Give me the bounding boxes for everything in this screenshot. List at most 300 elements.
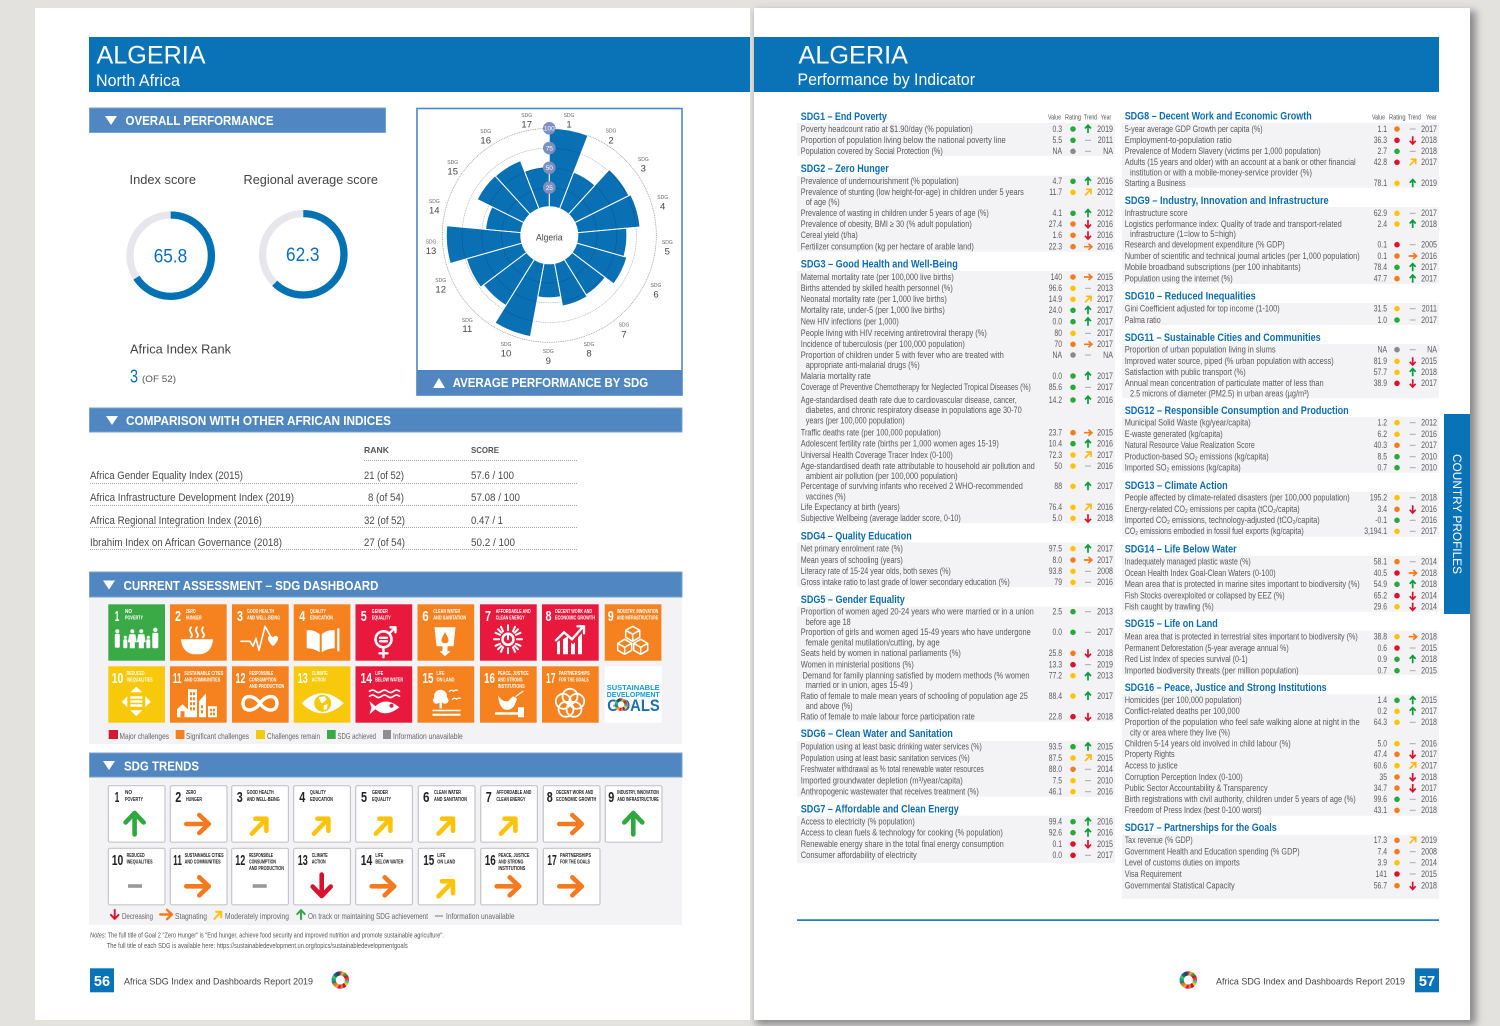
SDG axis labels: SDG: [426, 240, 437, 246]
scale markers: 25: [546, 185, 553, 192]
years: 2017: [1421, 749, 1437, 759]
years: 2015: [1421, 666, 1437, 676]
trends: [1410, 309, 1416, 320]
years: 2016: [1097, 230, 1113, 240]
indicators: SDG3: Malaria mortality rate: [801, 371, 871, 381]
dashboard legend: SDG achieved: [338, 731, 376, 741]
tile: SDG 11: AND COMMUNITIES: [184, 677, 221, 683]
tile: SDG 2: [170, 604, 227, 661]
comparison table: Africa Infrastructure Development Index (2019): [90, 492, 294, 504]
SDG axis labels: SDG: [435, 278, 446, 284]
section: SDG4: [797, 530, 1115, 587]
years: [1421, 304, 1437, 325]
header: overall performance: OVERALL PERFORMANCE: [126, 113, 274, 128]
values: [1374, 418, 1387, 473]
values: [1374, 345, 1388, 388]
indicators: SDG16: Proportion of the population who feel safe walking alone at night in the: [1125, 717, 1360, 727]
ratings: [1394, 347, 1400, 386]
header: comparison with other African indices: [90, 408, 682, 432]
tile: SDG 1: 1: [115, 608, 119, 625]
years: 2018: [1421, 632, 1437, 642]
values: [1049, 176, 1062, 252]
trend: SDG 4: [294, 786, 350, 842]
years: 2018: [1421, 579, 1437, 589]
column headers right: Trend: [1408, 112, 1421, 122]
comparison table: 32 (of 52): [364, 515, 405, 527]
years: 2010: [1421, 452, 1437, 462]
SDG axis labels: 11: [462, 324, 472, 335]
values: 99.6: [1374, 794, 1387, 804]
panel: SDG trends: [89, 753, 682, 925]
trends: [1084, 274, 1092, 522]
regional average gauge: 62.3: [286, 244, 320, 266]
trend: SDG 6: [418, 786, 475, 842]
indicators: SDG14: Fish caught by trawling (%): [1125, 602, 1214, 612]
ratings: [1070, 744, 1076, 794]
tile: SDG 2: 2: [175, 608, 181, 625]
indicators: SDG5: Ratio of female to male labour force participation rate: [801, 712, 975, 722]
indicators: SDG2: [801, 176, 1024, 252]
indicators: SDG3: appropriate anti-malarial drugs (%): [806, 360, 920, 370]
column headers left: Year: [1101, 112, 1112, 122]
SDG axis labels: 14: [429, 206, 440, 217]
years: 2017: [1421, 274, 1437, 284]
values: 93.8: [1049, 566, 1062, 576]
trend: SDG 17: FOR THE GOALS: [560, 859, 590, 865]
trends legend: Information unavailable: [446, 911, 515, 921]
dashboard legend: Major challenges: [120, 731, 169, 741]
years: 2019: [1421, 178, 1437, 188]
indicators: SDG5: Seats held by women in national parliaments (%): [801, 648, 961, 658]
years: 2015: [1097, 839, 1113, 849]
tile: SDG 14: 14: [360, 670, 372, 687]
trend: SDG 8: [543, 786, 600, 842]
column headers left: Value: [1048, 112, 1061, 122]
trend: SDG 11: [170, 848, 227, 905]
comparison table: 57.08 / 100: [471, 492, 520, 504]
trend: SDG 17: [543, 848, 600, 905]
left page: [35, 8, 750, 1020]
tile: SDG 14: LIFE: [375, 671, 384, 677]
values: 0.1: [1377, 240, 1387, 250]
panel footer bar: [417, 370, 682, 395]
scale markers: 50: [546, 165, 553, 172]
scale markers: 75: [546, 145, 553, 152]
trend: SDG 12: AND PRODUCTION: [249, 866, 284, 872]
values: 87.5: [1049, 753, 1062, 763]
heading: SDG7: SDG7 – Affordable and Clean Energy: [801, 804, 960, 816]
indicators: SDG16: Conflict-related deaths per 100,000: [1125, 706, 1240, 716]
SDG axis labels: SDG: [662, 240, 673, 246]
section: SDG12: [1122, 405, 1439, 473]
values: [1374, 695, 1387, 815]
ratings: [1394, 210, 1400, 282]
tile: SDG 5: [356, 604, 412, 661]
trend: SDG 1: NO: [125, 790, 132, 796]
indicators: SDG10: [1125, 304, 1280, 325]
notes: [90, 930, 444, 950]
indicators: SDG17: Tax revenue (% GDP): [1125, 835, 1193, 845]
SDG axis labels: SDG: [606, 128, 617, 134]
years: 2018: [1421, 717, 1437, 727]
tile: SDG 16: PEACE, JUSTICE: [498, 671, 529, 677]
index score gauge: Index score: [130, 173, 196, 187]
section: SDG11: [1122, 332, 1439, 398]
trends: [1084, 545, 1092, 582]
trend: SDG 6: 6: [423, 789, 429, 806]
tile: SDG 15: 15: [422, 670, 434, 687]
values: [1374, 632, 1387, 676]
values: 92.6: [1049, 828, 1062, 838]
tile: SDG 3: AND WELL-BEING: [247, 615, 280, 621]
SDG logo tile: GOALS: [607, 696, 660, 715]
heading: SDG4: SDG4 – Quality Education: [801, 530, 912, 542]
values: 47.7: [1374, 274, 1387, 284]
values: -0.1: [1375, 515, 1387, 525]
tile: SDG 12: AND PRODUCTION: [249, 684, 285, 690]
indicators: SDG3: Maternal mortality rate (per 100,000 live births): [801, 272, 954, 282]
years: 2017: [1421, 761, 1437, 771]
tile: SDG 12: 12: [236, 670, 246, 687]
years: 2017: [1421, 706, 1437, 716]
comparison table: Ibrahim Index on African Governance (2018): [90, 537, 282, 549]
footer: page 57: 57: [1419, 974, 1435, 990]
indicators: SDG14: Fish Stocks overexploited or collapsed by EEZ (%): [1125, 590, 1285, 600]
tile: SDG 7: 7: [485, 608, 491, 625]
ratings: [1394, 634, 1400, 674]
values: 46.1: [1049, 787, 1062, 797]
tile: SDG 8: ECONOMIC GROWTH: [555, 615, 595, 621]
footer: page 56: Africa SDG Index and Dashboards Report 2019: [124, 976, 313, 986]
values: 40.3: [1374, 440, 1387, 450]
values: 24.0: [1049, 305, 1062, 315]
tile: SDG 17: [542, 666, 599, 723]
trends: [1085, 743, 1091, 792]
trend: SDG 1: POVERTY: [125, 797, 143, 803]
values: 5.5: [1052, 135, 1062, 145]
values: 62.9: [1374, 208, 1387, 218]
tile: SDG 4: [294, 604, 350, 661]
indicators: SDG1: [801, 124, 1006, 156]
years: [1097, 124, 1114, 156]
section: SDG7: [797, 804, 1115, 863]
years: 2018: [1421, 219, 1437, 229]
indicators: SDG15: Red List Index of species survival (0-1): [1125, 654, 1248, 664]
SDG axis labels: 10: [501, 349, 511, 360]
years: [1421, 124, 1437, 188]
indicators: SDG8: Employment-to-population ratio: [1125, 135, 1232, 145]
indicators: SDG3: Universal Health Coverage Tracer Index (0-100): [801, 450, 953, 460]
tile: SDG 17: FOR THE GOALS: [559, 677, 589, 683]
tile: SDG 13: CLIMATE: [312, 671, 328, 677]
africa index rank: [130, 342, 232, 387]
ratings: [1394, 559, 1400, 610]
indicators: SDG12: E-waste generated (kg/capita): [1125, 429, 1223, 439]
years: [1421, 632, 1437, 676]
tile: SDG 8: 8: [546, 608, 552, 625]
values: [1374, 835, 1387, 891]
heading: SDG9: SDG9 – Industry, Innovation and Infrastructure: [1125, 195, 1329, 207]
indicators: SDG2: Prevalence of stunting (low height-for-age) in children under 5 years: [801, 187, 1024, 197]
values: NA: [1053, 146, 1063, 156]
values: 0.0: [1052, 627, 1062, 637]
africa index rank: Africa Index Rank: [130, 342, 232, 356]
tile: SDG 8: DECENT WORK AND: [555, 609, 592, 615]
SDG axis labels: 13: [426, 246, 436, 257]
SDG axis labels: 7: [621, 329, 627, 340]
years: 2015: [1421, 869, 1437, 879]
ratings: [1394, 306, 1400, 323]
values: 56.7: [1374, 881, 1387, 891]
panel: SDG dashboard: [89, 572, 682, 744]
years: 2015: [1421, 356, 1437, 366]
trend: SDG 9: AND INFRASTRUCTURE: [617, 797, 659, 803]
SDG axis labels: 5: [665, 246, 670, 257]
values: 23.7: [1049, 428, 1062, 438]
tile: SDG 9: AND INFRASTRUCTURE: [617, 615, 659, 621]
indicators: SDG8: institution or with a mobile-money-service provider (%): [1130, 168, 1312, 178]
SDG axis labels: SDG: [651, 283, 662, 289]
indicators: SDG14: Inadequately managed plastic waste (%): [1125, 556, 1251, 566]
trend: SDG 5: GENDER: [372, 790, 388, 796]
tile: SDG 15: LIFE: [436, 671, 445, 677]
trends: [1409, 213, 1417, 283]
values: 7.4: [1377, 847, 1387, 857]
trend: SDG 7: AFFORDABLE AND: [496, 790, 532, 796]
years: [1421, 557, 1437, 612]
indicators: SDG4: Mean years of schooling (years): [801, 555, 903, 565]
tile: SDG 11: 11: [173, 670, 182, 687]
tile: SDG 10: INEQUALITIES: [127, 677, 153, 683]
regional average gauge: Regional average score: [244, 173, 378, 187]
indicators: SDG15: [1125, 632, 1358, 676]
tile: SDG 7: AFFORDABLE AND: [496, 609, 531, 615]
trend: SDG 16: [481, 848, 537, 905]
years: 2011: [1098, 135, 1113, 145]
years: 2017: [1097, 305, 1113, 315]
years: 2016: [1097, 176, 1113, 186]
SDG axis labels: [426, 113, 673, 367]
scale markers: 100: [544, 126, 555, 132]
indicators: SDG2: Prevalence of obesity, BMI ≥ 30 (% adult population): [801, 219, 972, 229]
values: [1374, 557, 1387, 612]
years: 2016: [1097, 502, 1113, 512]
trend: SDG 5: [356, 786, 412, 842]
years: 2016: [1097, 577, 1113, 587]
trend: SDG 11: AND COMMUNITIES: [185, 859, 221, 865]
subtitle: North Africa: [96, 72, 181, 90]
values: NA: [1378, 345, 1388, 355]
column headers right: Year: [1426, 112, 1437, 122]
years: 2016: [1097, 439, 1113, 449]
trend: SDG 14: BELOW WATER: [375, 859, 404, 865]
trend: SDG 3: 3: [237, 789, 243, 806]
values: 79: [1054, 577, 1062, 587]
years: 2018: [1421, 135, 1437, 145]
values: 0.7: [1377, 666, 1387, 676]
trends: [1410, 498, 1416, 531]
indicators: SDG12: Production-based SO₂ emissions (kg/capita): [1125, 452, 1269, 462]
indicators: SDG3: Coverage of Preventive Chemotherapy for Neglected Tropical Diseases (%): [801, 382, 1031, 392]
indicators: SDG16: Corruption Perception Index (0-100): [1125, 772, 1243, 782]
values: 13.3: [1049, 660, 1062, 670]
years: 2017: [1421, 378, 1437, 388]
notes: The full title of each SDG is available here: https://sustainabledevelopment.un.org/topics/sustainabledevelopmentgoals: [107, 941, 408, 950]
values: 81.9: [1374, 356, 1387, 366]
years: 2017: [1097, 627, 1113, 637]
trend: SDG 17: PARTNERSHIPS: [560, 853, 592, 859]
SDG axis labels: SDG: [564, 113, 575, 119]
indicators: SDG12: Municipal Solid Waste (kg/year/capita): [1125, 418, 1251, 428]
trend: SDG 2: HUNGER: [186, 797, 202, 803]
trends: [1410, 697, 1416, 810]
years: 2016: [1421, 794, 1437, 804]
footer: page 56: [90, 968, 349, 992]
values: 3.9: [1377, 858, 1387, 868]
indicators: SDG5: Proportion of women aged 20-24 years who were married or in a union: [801, 606, 1034, 616]
indicators: SDG3: Neonatal mortality rate (per 1,000 live births): [801, 294, 947, 304]
indicators: SDG9: [1125, 208, 1360, 284]
years: 2018: [1421, 568, 1437, 578]
years: 2018: [1097, 648, 1113, 658]
dashboard legend: Significant challenges: [186, 731, 249, 741]
indicators: SDG13: Imported CO₂ emissions, technology-adjusted (tCO₂/capita): [1125, 515, 1320, 525]
indicators: SDG3: Adolescent fertility rate (births per 1,000 women ages 15-19): [801, 438, 999, 448]
trends: [1085, 612, 1091, 720]
values: NA: [1053, 350, 1063, 360]
tile: SDG 7: [480, 604, 537, 661]
values: 0.1: [1052, 839, 1062, 849]
indicators: SDG9: infrastructure (1=low to 5=high): [1130, 229, 1236, 239]
years: 2017: [1097, 294, 1113, 304]
indicators: SDG16: [1125, 695, 1360, 815]
years: 2014: [1421, 591, 1437, 601]
indicators: SDG17: Visa Requirement: [1125, 869, 1182, 879]
values: 25.8: [1049, 648, 1062, 658]
values: 76.4: [1049, 502, 1062, 512]
values: 1.6: [1052, 230, 1062, 240]
comparison table: Africa Gender Equality Index (2015): [90, 470, 243, 482]
years: 2016: [1097, 787, 1113, 797]
values: 4.1: [1052, 208, 1062, 218]
side tab: country profiles: [1444, 414, 1470, 614]
tile: SDG 2: ZERO: [186, 609, 196, 615]
years: [1421, 835, 1437, 891]
comparison table: 8 (of 54): [368, 492, 404, 504]
values: [1049, 742, 1062, 797]
SDG logo tile: [605, 666, 662, 723]
values: 1.1: [1377, 124, 1387, 134]
years: 2016: [1097, 817, 1113, 827]
years: 2016: [1421, 429, 1437, 439]
indicators: SDG1: Population covered by Social Protection (%): [801, 146, 943, 156]
section: SDG1: [797, 111, 1115, 156]
header: overall performance: [90, 108, 386, 132]
values: 14.2: [1049, 395, 1062, 405]
indicators: SDG15: Mean area that is protected in terrestrial sites important to biodiversity (%): [1125, 632, 1358, 642]
years: 2017: [1421, 157, 1437, 167]
values: 97.5: [1049, 544, 1062, 554]
trend: SDG 13: ACTION: [312, 859, 326, 865]
values: 65.2: [1374, 591, 1387, 601]
tile: SDG 1: [108, 604, 165, 661]
values: 7.5: [1052, 776, 1062, 786]
indicators: SDG5: [801, 606, 1034, 722]
years: NA: [1103, 146, 1114, 156]
values: 8.0: [1052, 555, 1062, 565]
section: SDG16: [1122, 682, 1439, 816]
ratings: [1394, 420, 1400, 471]
footer: page 57: [1180, 968, 1439, 992]
values: 0.2: [1377, 706, 1387, 716]
values: [1049, 817, 1062, 860]
years: 2008: [1421, 847, 1437, 857]
comparison table: RANK: [364, 445, 390, 455]
years: [1421, 493, 1437, 536]
indicators: SDG5: married or in union, ages 15-49 ): [806, 680, 913, 690]
values: 31.5: [1374, 304, 1387, 314]
indicators: SDG17: Government Health and Education spending (% GDP): [1125, 846, 1300, 856]
column headers right: Rating: [1389, 112, 1406, 122]
icon: SDG wheel: [1180, 971, 1197, 989]
tile: SDG 5: GENDER: [372, 609, 388, 615]
indicators: SDG16: Property Rights: [1125, 749, 1175, 759]
tile: SDG 17: PARTNERSHIPS: [559, 671, 590, 677]
tile: SDG 5: 5: [361, 608, 367, 625]
values: 14.9: [1049, 294, 1062, 304]
trends: [1085, 125, 1091, 151]
indicators: SDG13: Energy-related CO₂ emissions per capita (tCO₂/capita): [1125, 504, 1300, 514]
indicators: SDG5: Proportion of girls and women aged 15-49 years who have undergone: [801, 627, 1031, 637]
indicators: SDG4: [801, 544, 1010, 587]
indicators: SDG5: Women in ministerial positions (%): [801, 660, 914, 670]
indicators: SDG2: Prevalence of undernourishment (% population): [801, 176, 959, 186]
years: 2018: [1421, 493, 1437, 503]
values: 57.7: [1374, 367, 1387, 377]
values: 34.7: [1374, 783, 1387, 793]
indicators: SDG11: Annual mean concentration of particulate matter of less than: [1125, 378, 1324, 388]
indicators: SDG13: [1125, 492, 1350, 536]
values: [1049, 607, 1062, 722]
section: SDG8: [1122, 110, 1439, 188]
trends legend: Decreasing: [122, 911, 153, 921]
indicators: SDG7: Access to clean fuels & technology for cooking (% population): [801, 828, 1003, 838]
trend: SDG 8: ECONOMIC GROWTH: [556, 797, 597, 803]
indicators: SDG5: female genital mutilation/cutting, by age: [806, 638, 940, 648]
indicators: SDG3: ambient air pollution (per 100,000 population): [806, 471, 958, 481]
values: 38.8: [1374, 632, 1387, 642]
SDG axis labels: SDG: [521, 113, 532, 119]
values: 27.4: [1049, 219, 1062, 229]
SDG axis labels: 2: [608, 135, 614, 146]
years: 2018: [1421, 805, 1437, 815]
column headers right: Value: [1372, 112, 1385, 122]
indicators: SDG16: Public Sector Accountability & Transparency: [1125, 783, 1268, 793]
indicators: SDG10: Gini Coefficient adjusted for top income (1-100): [1125, 304, 1280, 314]
comparison table: SCORE: [471, 445, 499, 455]
indicators: SDG17: [1125, 835, 1300, 890]
column headers left: Trend: [1084, 112, 1097, 122]
years: 2017: [1421, 526, 1437, 536]
dashboard legend: [109, 730, 463, 741]
years: 2018: [1097, 712, 1113, 722]
trends legend: Stagnating: [175, 911, 207, 921]
indicators: SDG3: [801, 272, 1035, 523]
trend: SDG 11: SUSTAINABLE CITIES: [185, 853, 224, 859]
values: 3,194.1: [1364, 526, 1387, 536]
years: 2016: [1097, 395, 1113, 405]
values: 70: [1054, 339, 1062, 349]
